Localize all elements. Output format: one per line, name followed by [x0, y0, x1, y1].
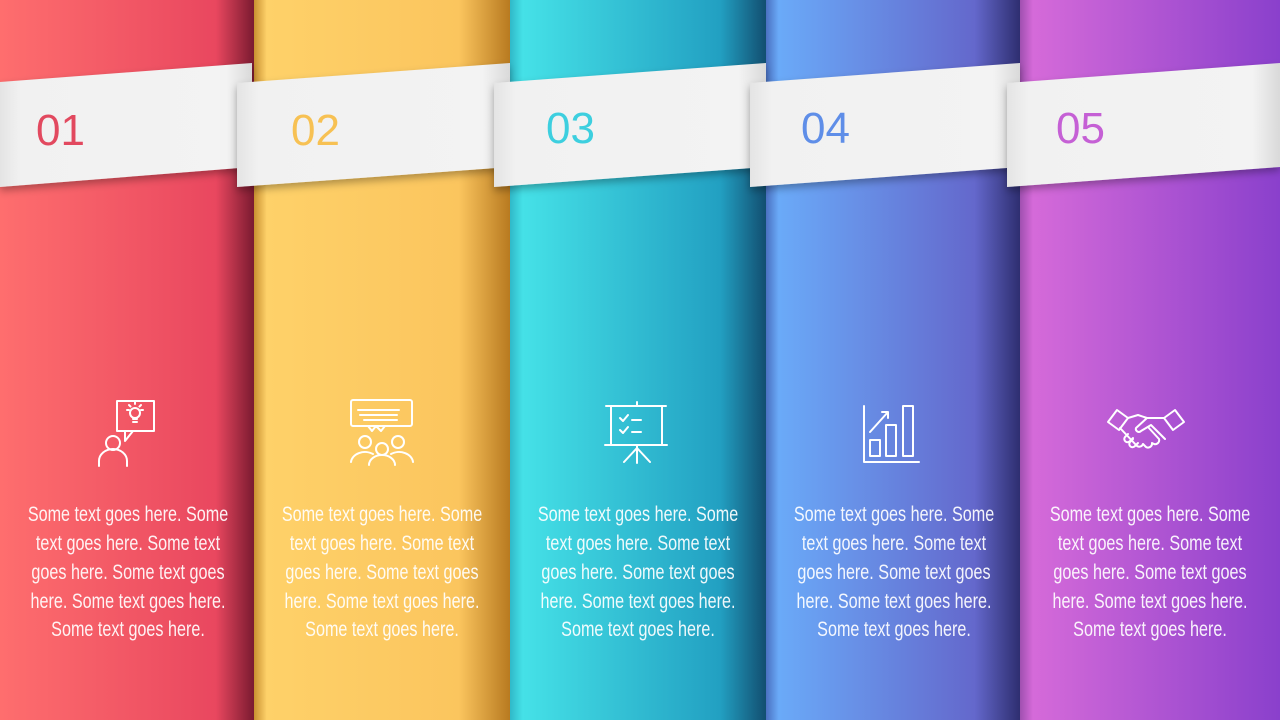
- column 3: [510, 0, 766, 720]
- text 5: text goes here. Some text: [1058, 531, 1243, 554]
- text 1: goes here. Some text goes: [31, 560, 225, 583]
- text 3: [538, 502, 738, 640]
- ribbon 4: 04: [801, 104, 850, 153]
- icon: presentation board: [605, 402, 667, 463]
- text 2: [282, 502, 482, 640]
- text 3: Some text goes here. Some: [538, 502, 738, 525]
- text 4: Some text goes here.: [817, 617, 971, 640]
- text 1: [28, 502, 228, 640]
- icon: group discussion: [351, 400, 413, 465]
- column 5: [1020, 0, 1280, 720]
- text 1: text goes here. Some text: [36, 531, 221, 554]
- column 1: [0, 0, 254, 720]
- text 4: text goes here. Some text: [802, 531, 987, 554]
- text 5: goes here. Some text goes: [1053, 560, 1247, 583]
- text 1: here. Some text goes here.: [31, 589, 225, 612]
- ribbon 4: [750, 63, 1020, 187]
- text 4: [794, 502, 994, 640]
- text 5: Some text goes here. Some: [1050, 502, 1250, 525]
- ribbon 3: [494, 63, 766, 187]
- column 2: [254, 0, 510, 720]
- text 3: text goes here. Some text: [546, 531, 731, 554]
- text 5: [1050, 502, 1250, 640]
- ribbon 1: 01: [36, 106, 85, 155]
- ribbon 1: [0, 63, 252, 187]
- icon: idea person: [99, 401, 154, 466]
- column 4: [766, 0, 1020, 720]
- text 2: Some text goes here.: [305, 617, 459, 640]
- text 5: here. Some text goes here.: [1053, 589, 1247, 612]
- text 2: goes here. Some text goes: [285, 560, 479, 583]
- text 4: goes here. Some text goes: [797, 560, 991, 583]
- text 3: here. Some text goes here.: [541, 589, 735, 612]
- text 5: Some text goes here.: [1073, 617, 1227, 640]
- text 1: Some text goes here.: [51, 617, 205, 640]
- ribbon 2: 02: [291, 106, 340, 155]
- icon: growth chart: [864, 406, 919, 462]
- text 4: here. Some text goes here.: [797, 589, 991, 612]
- text 2: here. Some text goes here.: [285, 589, 479, 612]
- ribbon 5: 05: [1056, 104, 1105, 153]
- text 3: goes here. Some text goes: [541, 560, 735, 583]
- text 3: Some text goes here.: [561, 617, 715, 640]
- icon: handshake: [1108, 410, 1184, 448]
- ribbon 2: [237, 63, 510, 187]
- text 2: text goes here. Some text: [290, 531, 475, 554]
- text 4: Some text goes here. Some: [794, 502, 994, 525]
- ribbon 3: 03: [546, 104, 595, 153]
- ribbon 5: [1007, 63, 1280, 187]
- text 2: Some text goes here. Some: [282, 502, 482, 525]
- text 1: Some text goes here. Some: [28, 502, 228, 525]
